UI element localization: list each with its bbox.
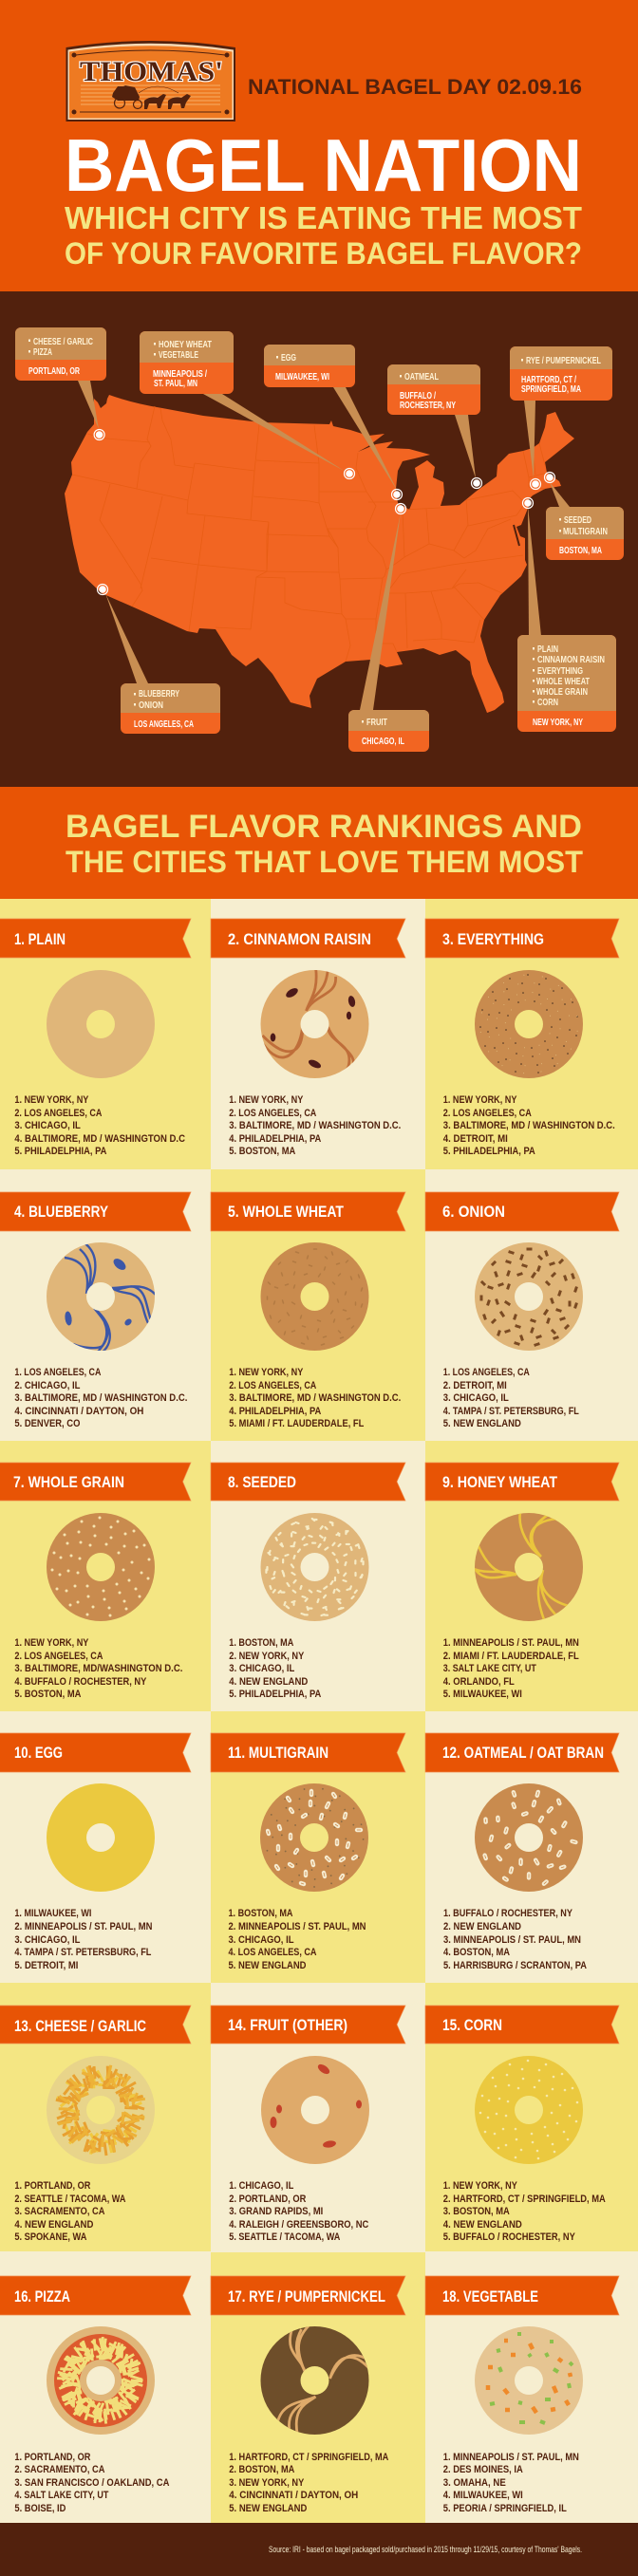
- panel: 12. Oatmeal / Oat Bran: [425, 1711, 638, 1983]
- city list: 5. BOSTON, MA: [229, 1146, 295, 1157]
- city list: 3. GRAND RAPIDS, MI: [229, 2206, 323, 2217]
- city list: 5. DENVER, CO: [14, 1418, 81, 1429]
- banner: 7. Whole Grain: 7. WHOLE GRAIN: [13, 1474, 124, 1491]
- callout: Milwaukee: [264, 345, 355, 387]
- banner: 4. Blueberry: [0, 1192, 191, 1231]
- city list: 4. BOSTON, MA: [443, 1947, 510, 1958]
- bagel: rye: [260, 2325, 370, 2436]
- city list: 1. NEW YORK, NY: [14, 1637, 89, 1649]
- city list: 5. PHILADELPHIA, PA: [229, 1689, 321, 1700]
- callout: Portland: CHEESE / GARLIC: [33, 337, 93, 347]
- bagel: oatmeal: [472, 1781, 586, 1895]
- city list: 4. CINCINNATI / DAYTON, OH: [14, 1406, 143, 1417]
- banner: 11. Multigrain: 11. MULTIGRAIN: [228, 1745, 328, 1762]
- city list: 4. ORLANDO, FL: [443, 1676, 515, 1688]
- callout: Hartford: SPRINGFIELD, MA: [521, 384, 581, 395]
- city list: 3. BALTIMORE, MD / WASHINGTON D.C.: [229, 1120, 401, 1131]
- city list: [443, 1367, 579, 1429]
- city list: [229, 1637, 321, 1700]
- city list: 2. LOS ANGELES, CA: [14, 1108, 102, 1119]
- subtitle: WHICH CITY IS EATING THE MOST: [65, 200, 582, 235]
- banner: 3. Everything: [425, 919, 619, 958]
- callout: Milwaukee: MILWAUKEE, WI: [275, 372, 329, 383]
- callout: Minneapolis: VEGETABLE: [159, 350, 198, 361]
- city list: 5. NEW ENGLAND: [443, 1418, 521, 1429]
- city list: [443, 1094, 615, 1157]
- logo: Thomas': [66, 41, 235, 121]
- panel: 4. Blueberry: [0, 1169, 211, 1441]
- panel: 2. Cinnamon Raisin: [211, 899, 425, 1169]
- city list: 3. BALTIMORE, MD/WASHINGTON D.C.: [14, 1663, 182, 1674]
- callout: Minneapolis: MINNEAPOLIS /: [153, 369, 207, 380]
- banner: 13. Cheese / Garlic: 13. CHEESE / GARLIC: [14, 2018, 146, 2035]
- city list: 2. CHICAGO, IL: [14, 1380, 81, 1391]
- banner: 3. Everything: 3. EVERYTHING: [442, 931, 544, 948]
- city list: [14, 1637, 182, 1700]
- city list: 5. NEW ENGLAND: [228, 1960, 307, 1971]
- callout: Los Angeles: LOS ANGELES, CA: [134, 719, 194, 730]
- city list: 2. DETROIT, MI: [443, 1380, 507, 1391]
- banner: 14. Fruit (Other): [211, 2006, 405, 2044]
- banner: 10. Egg: [0, 1733, 191, 1772]
- section heading: BAGEL FLAVOR RANKINGS AND: [66, 809, 582, 845]
- city list: 4. BUFFALO / ROCHESTER, NY: [14, 1676, 147, 1688]
- callout: Chicago: FRUIT: [366, 718, 387, 728]
- city list: 1. BOSTON, MA: [229, 1637, 293, 1649]
- city list: [229, 1367, 401, 1429]
- header band: [0, 0, 638, 291]
- city list: 3. BALTIMORE, MD / WASHINGTON D.C.: [443, 1120, 615, 1131]
- banner: 1. Plain: [0, 919, 191, 958]
- panel: 14. Fruit (Other): [211, 1983, 425, 2252]
- city list: [229, 2452, 388, 2514]
- bagel: everything: [468, 962, 590, 1085]
- banner: 12. Oatmeal / Oat Bran: 12. OATMEAL / OAT BRAN: [442, 1745, 604, 1762]
- banner: 15. Corn: [425, 2006, 619, 2044]
- banner: 1. Plain: 1. PLAIN: [14, 931, 66, 948]
- bagel: vegetable: [475, 2326, 583, 2435]
- city list: 3. CHICAGO, IL: [229, 1663, 295, 1674]
- bagel: egg: [47, 1783, 155, 1892]
- callout: Buffalo: OATMEAL: [404, 372, 439, 383]
- city list: 1. NEW YORK, NY: [229, 1094, 304, 1106]
- map panel: [0, 291, 638, 787]
- panel: 11. Multigrain: [211, 1711, 425, 1983]
- subtitle: [65, 200, 582, 271]
- city list: [229, 1094, 401, 1157]
- callout: Los Angeles: BLUEBERRY: [139, 689, 179, 700]
- city list: 3. CHICAGO, IL: [228, 1934, 294, 1946]
- city list: 3. BALTIMORE, MD / WASHINGTON D.C.: [229, 1392, 401, 1404]
- banner: 8. Seeded: [211, 1463, 405, 1501]
- banner: 6. Onion: [425, 1192, 619, 1231]
- city list: 1. MINNEAPOLIS / ST. PAUL, MN: [443, 1637, 579, 1649]
- callout: Minneapolis: ST. PAUL, MN: [154, 379, 197, 389]
- city list: 3. SACRAMENTO, CA: [14, 2206, 104, 2217]
- banner: 10. Egg: 10. EGG: [14, 1745, 63, 1762]
- callout: Buffalo: ROCHESTER, NY: [400, 401, 456, 411]
- callout: Portland: PIZZA: [33, 347, 52, 358]
- panel: 10. Egg: [0, 1711, 211, 1983]
- city list: [443, 2452, 579, 2514]
- callout: Buffalo: BUFFALO /: [400, 391, 436, 401]
- city list: 2. DES MOINES, IA: [443, 2464, 523, 2475]
- callout: Boston: [546, 507, 624, 560]
- city list: 1. BOSTON, MA: [228, 1908, 293, 1919]
- city list: 1. PORTLAND, OR: [14, 2452, 90, 2463]
- city list: [14, 1908, 152, 1971]
- city list: 2. NEW ENGLAND: [443, 1921, 521, 1932]
- bagel: honey wheat: [474, 1512, 583, 1622]
- city list: 3. BOSTON, MA: [443, 2206, 510, 2217]
- callout: Hartford: [510, 346, 612, 401]
- city list: 2. BOSTON, MA: [229, 2464, 294, 2475]
- callout: Boston: SEEDED: [564, 515, 591, 526]
- city list: 4. BALTIMORE, MD / WASHINGTON D.C: [14, 1133, 185, 1145]
- city list: 4. PHILADELPHIA, PA: [229, 1133, 321, 1145]
- city list: 4. RALEIGH / GREENSBORO, NC: [229, 2219, 368, 2231]
- callout: Milwaukee: EGG: [281, 353, 296, 364]
- city list: 4. TAMPA / ST. PETERSBURG, FL: [443, 1406, 579, 1417]
- panel: 16. Pizza: [0, 2251, 211, 2523]
- city list: 4. DETROIT, MI: [443, 1133, 508, 1145]
- callout: New York: PLAIN: [537, 644, 558, 655]
- banner: 14. Fruit (Other): 14. FRUIT (OTHER): [228, 2017, 347, 2034]
- callout: New York: WHOLE GRAIN: [536, 687, 588, 698]
- subtitle: OF YOUR FAVORITE BAGEL FLAVOR?: [65, 236, 582, 271]
- city list: 1. NEW YORK, NY: [443, 1094, 517, 1106]
- city list: 4. PHILADELPHIA, PA: [229, 1406, 321, 1417]
- callout: Boston: MULTIGRAIN: [563, 527, 608, 537]
- callout: New York: WHOLE WHEAT: [536, 677, 590, 687]
- city list: 5. MIAMI / FT. LAUDERDALE, FL: [229, 1418, 365, 1429]
- section heading: THE CITIES THAT LOVE THEM MOST: [66, 845, 583, 879]
- callout: Boston: BOSTON, MA: [559, 546, 602, 556]
- callout: New York: NEW YORK, NY: [533, 718, 583, 728]
- city list: 5. SPOKANE, WA: [14, 2231, 86, 2243]
- city list: [443, 1908, 587, 1971]
- city list: 2. MIAMI / FT. LAUDERDALE, FL: [443, 1651, 579, 1662]
- banner: 5. Whole Wheat: 5. WHOLE WHEAT: [228, 1204, 344, 1221]
- city list: 5. PHILADELPHIA, PA: [443, 1146, 535, 1157]
- US map: [65, 395, 574, 713]
- banner: 18. Vegetable: 18. VEGETABLE: [442, 2288, 538, 2305]
- panel: 13. Cheese / Garlic: [0, 1983, 211, 2251]
- section heading band: [0, 787, 638, 899]
- title: BAGEL NATION: [65, 123, 582, 207]
- callout: Portland: PORTLAND, OR: [28, 366, 81, 377]
- callout: Los Angeles: ONION: [139, 700, 163, 711]
- panel: 7. Whole Grain: [0, 1441, 211, 1711]
- city list: 3. BALTIMORE, MD / WASHINGTON D.C.: [14, 1392, 187, 1404]
- city list: 1. NEW YORK, NY: [443, 2180, 517, 2192]
- bagel: corn: [475, 2056, 583, 2164]
- callout: Buffalo: [387, 364, 480, 415]
- city list: [14, 2452, 169, 2514]
- panel: 1. Plain: [0, 899, 211, 1169]
- city list: 3. SAN FRANCISCO / OAKLAND, CA: [14, 2477, 169, 2489]
- city list: 2. MINNEAPOLIS / ST. PAUL, MN: [228, 1921, 366, 1932]
- callout: Chicago: [348, 710, 429, 752]
- bagel: pizza: [47, 2326, 155, 2435]
- callout: Hartford: RYE / PUMPERNICKEL: [526, 356, 601, 366]
- city list: 2. LOS ANGELES, CA: [229, 1108, 316, 1119]
- banner: 17. Rye / Pumpernickel: 17. RYE / PUMPERNICKEL: [228, 2288, 385, 2305]
- bagel: cinnamon raisin: [260, 967, 368, 1079]
- banner: 9. Honey Wheat: [425, 1463, 619, 1501]
- city list: [443, 2180, 606, 2243]
- callout: Los Angeles: [121, 683, 220, 734]
- city list: 2. LOS ANGELES, CA: [14, 1651, 103, 1662]
- banner: 4. Blueberry: 4. BLUEBERRY: [14, 1204, 108, 1221]
- city list: [14, 2180, 125, 2243]
- city list: 5. SEATTLE / TACOMA, WA: [229, 2231, 340, 2243]
- banner: 13. Cheese / Garlic: [0, 2006, 191, 2044]
- banner: 18. Vegetable: [425, 2276, 619, 2315]
- banner: 6. Onion: 6. ONION: [442, 1204, 505, 1221]
- panel: 9. Honey Wheat: [425, 1441, 638, 1711]
- city list: 1. MINNEAPOLIS / ST. PAUL, MN: [443, 2452, 579, 2463]
- banner: 7. Whole Grain: [0, 1463, 191, 1501]
- markers: [94, 429, 554, 594]
- city list: 2. PORTLAND, OR: [229, 2193, 306, 2205]
- bagel: onion: [475, 1242, 583, 1351]
- bagel: whole grain: [47, 1513, 155, 1621]
- city list: 4. CINCINNATI / DAYTON, OH: [229, 2490, 358, 2501]
- bagel: fruit: [261, 2056, 369, 2164]
- city list: 3. CHICAGO, IL: [14, 1120, 81, 1131]
- panel: 18. Vegetable: [425, 2251, 638, 2523]
- city list: 2. SEATTLE / TACOMA, WA: [14, 2193, 125, 2205]
- banner: 8. Seeded: 8. SEEDED: [228, 1474, 296, 1491]
- date line: NATIONAL BAGEL DAY 02.09.16: [248, 75, 582, 99]
- city list: 1. NEW YORK, NY: [14, 1094, 89, 1106]
- city list: 1. LOS ANGELES, CA: [14, 1367, 101, 1378]
- city list: 2. SACRAMENTO, CA: [14, 2464, 104, 2475]
- city list: 4. MILWAUKEE, WI: [443, 2490, 523, 2501]
- city list: 1. HARTFORD, CT / SPRINGFIELD, MA: [229, 2452, 388, 2463]
- city list: 1. LOS ANGELES, CA: [443, 1367, 530, 1378]
- city list: 1. MILWAUKEE, WI: [14, 1908, 91, 1919]
- bagel: plain: [47, 970, 155, 1078]
- city list: 3. NEW YORK, NY: [229, 2477, 305, 2489]
- city list: 5. DETROIT, MI: [14, 1960, 78, 1971]
- city list: [14, 1094, 185, 1157]
- banner: 16. Pizza: [0, 2276, 191, 2315]
- section heading: [66, 809, 583, 879]
- callout: New York: EVERYTHING: [537, 666, 583, 677]
- city list: 3. CHICAGO, IL: [443, 1392, 509, 1404]
- panel: 8. Seeded: [211, 1441, 425, 1711]
- panel: 5. Whole Wheat: [211, 1169, 425, 1441]
- city list: 2. LOS ANGELES, CA: [443, 1108, 532, 1119]
- city list: 1. NEW YORK, NY: [229, 1367, 304, 1378]
- logo: Thomas': THOMAS': [80, 56, 223, 87]
- city list: 1. CHICAGO, IL: [229, 2180, 294, 2192]
- banner: 2. Cinnamon Raisin: [211, 919, 405, 958]
- city list: [229, 2180, 368, 2243]
- bagel: whole wheat: [260, 1242, 368, 1351]
- city list: 5. HARRISBURG / SCRANTON, PA: [443, 1960, 587, 1971]
- banner: 11. Multigrain: [211, 1733, 405, 1772]
- city list: 5. BOSTON, MA: [14, 1689, 81, 1700]
- banner: 5. Whole Wheat: [211, 1192, 405, 1231]
- callout: New York: [517, 635, 616, 732]
- city list: 5. NEW ENGLAND: [229, 2503, 307, 2514]
- city list: 1. BUFFALO / ROCHESTER, NY: [443, 1908, 573, 1919]
- city list: 4. NEW ENGLAND: [229, 1676, 308, 1688]
- city list: 4. TAMPA / ST. PETERSBURG, FL: [14, 1947, 152, 1958]
- banner: 17. Rye / Pumpernickel: [211, 2276, 405, 2315]
- city list: 3. OMAHA, NE: [443, 2477, 506, 2489]
- callout: New York: CINNAMON RAISIN: [537, 655, 605, 665]
- bagel: cheese garlic: [47, 2056, 155, 2164]
- city list: 4. NEW ENGLAND: [14, 2219, 93, 2231]
- banner: 2. Cinnamon Raisin: 2. CINNAMON RAISIN: [228, 931, 371, 948]
- banner: 16. Pizza: 16. PIZZA: [14, 2288, 70, 2305]
- city list: [443, 1637, 579, 1700]
- banner: 15. Corn: 15. CORN: [442, 2017, 502, 2034]
- panel: 15. Corn: [425, 1983, 638, 2251]
- panel: 6. Onion: [425, 1169, 638, 1441]
- callout: Minneapolis: [140, 331, 234, 394]
- panel: 3. Everything: [425, 899, 638, 1169]
- city list: [228, 1908, 366, 1971]
- city list: 5. BUFFALO / ROCHESTER, NY: [443, 2231, 575, 2243]
- city list: 1. PORTLAND, OR: [14, 2180, 90, 2192]
- city list: 3. SALT LAKE CITY, UT: [443, 1663, 536, 1674]
- city list: 3. MINNEAPOLIS / ST. PAUL, MN: [443, 1934, 581, 1946]
- city list: 4. LOS ANGELES, CA: [228, 1947, 317, 1958]
- city list: 5. MILWAUKEE, WI: [443, 1689, 522, 1700]
- bagel: blueberry: [47, 1242, 156, 1353]
- callout: Chicago: CHICAGO, IL: [362, 737, 404, 747]
- city list: 4. NEW ENGLAND: [443, 2219, 522, 2231]
- city list: 5. BOISE, ID: [14, 2503, 66, 2514]
- city list: 2. HARTFORD, CT / SPRINGFIELD, MA: [443, 2193, 606, 2205]
- city list: 2. MINNEAPOLIS / ST. PAUL, MN: [14, 1921, 152, 1932]
- banner: 12. Oatmeal / Oat Bran: [425, 1733, 619, 1772]
- city list: 5. PHILADELPHIA, PA: [14, 1146, 106, 1157]
- city list: 3. CHICAGO, IL: [14, 1934, 81, 1946]
- city list: 2. NEW YORK, NY: [229, 1651, 305, 1662]
- callout: Hartford: HARTFORD, CT /: [521, 375, 576, 385]
- footer band: [0, 2523, 638, 2576]
- panel: 17. Rye / Pumpernickel: [211, 2252, 425, 2523]
- bagel: multigrain: [257, 1780, 371, 1895]
- city list: 4. SALT LAKE CITY, UT: [14, 2490, 109, 2501]
- bagel: seeded: [253, 1506, 376, 1629]
- city list: [14, 1367, 187, 1429]
- callout: Portland: [15, 327, 106, 381]
- city list: 5. PEORIA / SPRINGFIELD, IL: [443, 2503, 567, 2514]
- callout: New York: CORN: [537, 698, 558, 708]
- city list: 2. LOS ANGELES, CA: [229, 1380, 316, 1391]
- banner: 9. Honey Wheat: 9. HONEY WHEAT: [442, 1474, 557, 1491]
- callout: Minneapolis: HONEY WHEAT: [159, 340, 212, 350]
- leader lines: [78, 381, 570, 710]
